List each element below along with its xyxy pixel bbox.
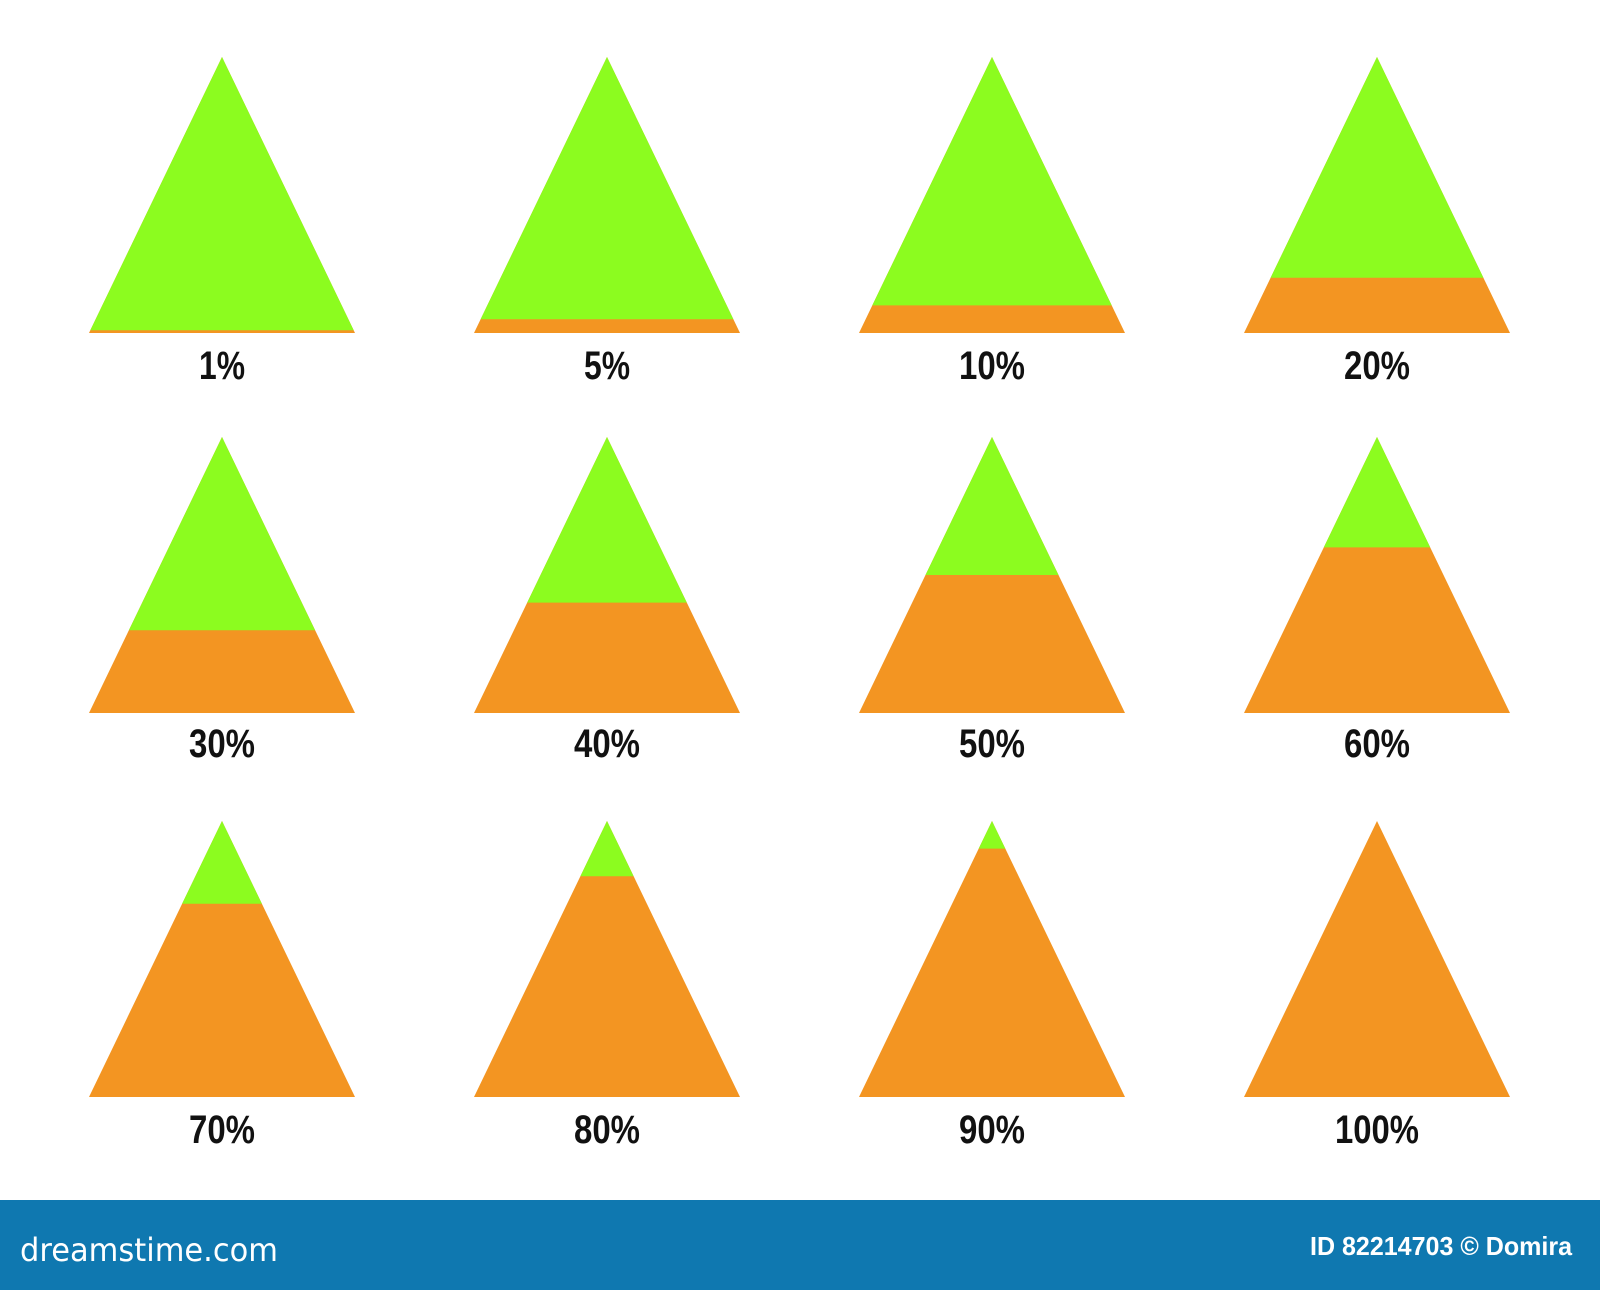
chart: 50%: 50%	[959, 722, 1025, 766]
chart: 40%: 40%	[574, 722, 640, 766]
chart: 70%: 70%	[189, 1108, 255, 1152]
chart: 50%	[859, 437, 1125, 766]
chart: 40%	[474, 437, 740, 766]
footer logo: dreamstime.com	[20, 1231, 278, 1269]
chart: 20%	[1244, 57, 1510, 388]
chart: 100%	[1244, 821, 1510, 1152]
chart: 90%: 90%	[959, 1108, 1025, 1152]
chart: 5%	[474, 57, 740, 388]
chart: 90%	[859, 821, 1125, 1152]
chart: 10%: 10%	[959, 344, 1025, 388]
footer bar	[0, 1200, 1600, 1290]
chart: 10%	[859, 57, 1125, 388]
chart: 100%: 100%	[1335, 1108, 1419, 1152]
chart: 70%	[89, 821, 355, 1152]
footer id: ID 82214703 © Domira	[1310, 1231, 1573, 1261]
chart: 1%: 1%	[199, 344, 245, 388]
chart: 80%: 80%	[574, 1108, 640, 1152]
chart: 5%: 5%	[584, 344, 630, 388]
chart: 60%: 60%	[1344, 722, 1410, 766]
chart: 30%: 30%	[189, 722, 255, 766]
chart: 60%	[1244, 437, 1510, 766]
chart: 20%: 20%	[1344, 344, 1410, 388]
chart: 30%	[89, 437, 355, 766]
chart: 1%	[89, 57, 355, 388]
chart: 80%	[474, 821, 740, 1152]
